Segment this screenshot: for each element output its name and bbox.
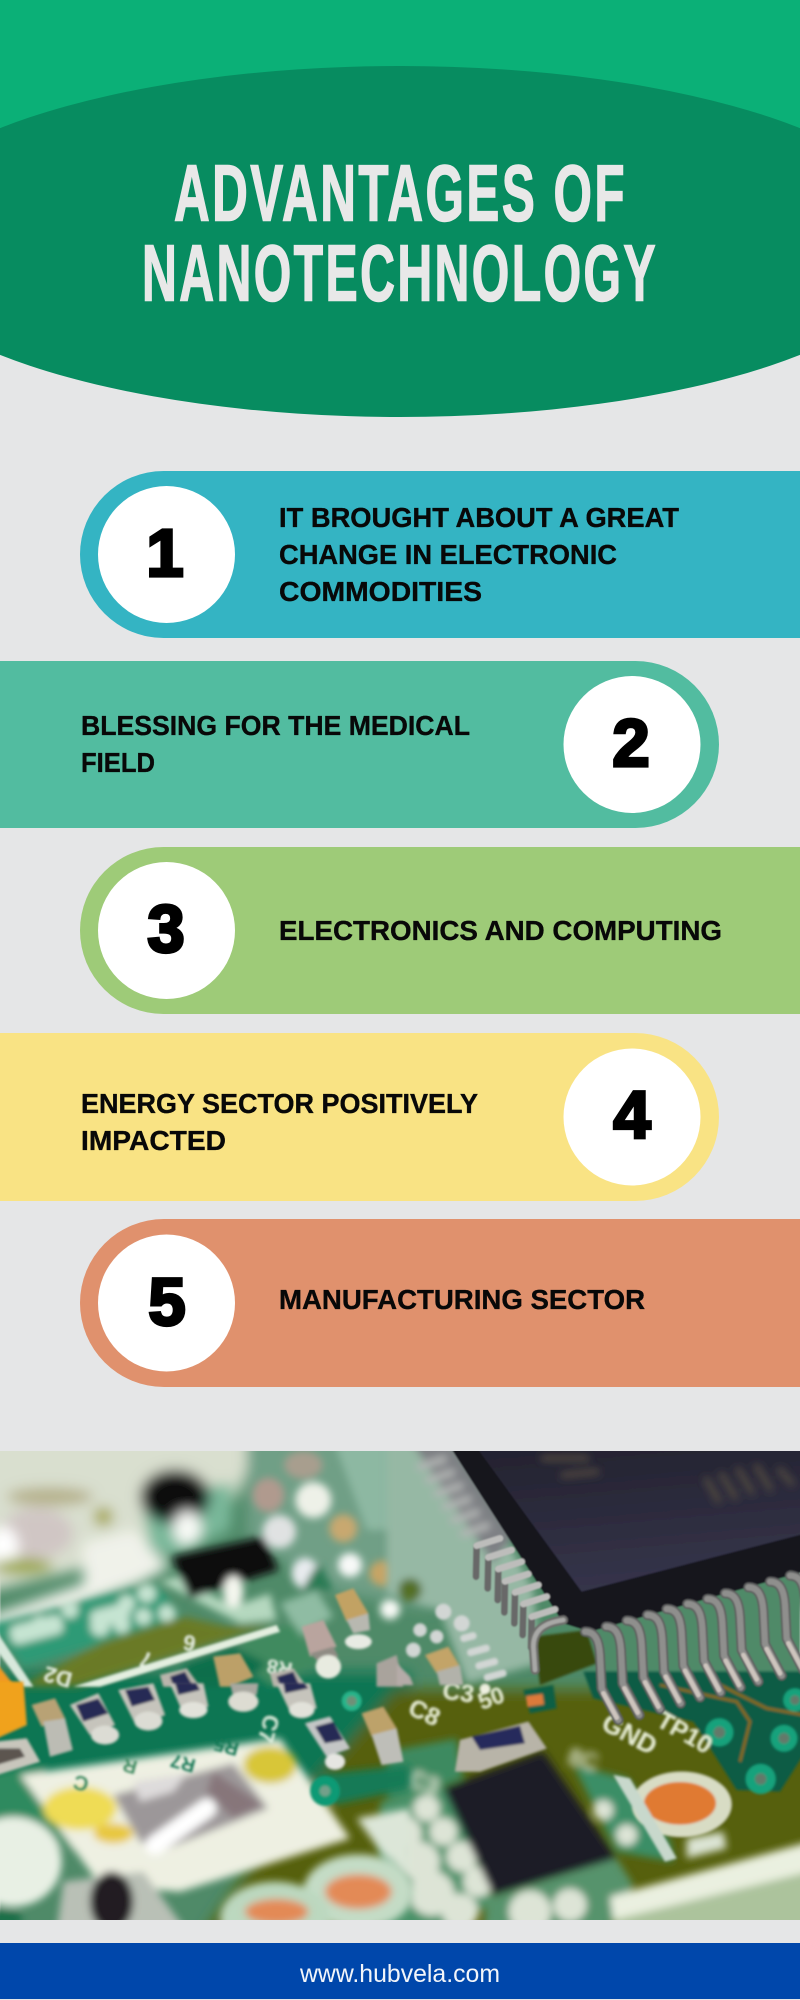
item 5 text: MANUFACTURING SECTOR (279, 1284, 645, 1315)
item 1 number badge (98, 486, 235, 623)
header banner (0, 0, 800, 417)
photo lower right: GND (597, 1707, 662, 1761)
circuit board photo (0, 1451, 800, 1920)
item 2 (0, 661, 719, 828)
item 3 number badge (98, 862, 235, 999)
photo lower left: C7 (253, 1712, 284, 1746)
photo lower right: C8 (404, 1694, 444, 1732)
item 1 (80, 471, 800, 638)
item 4 (0, 1033, 719, 1201)
item 4 text: ENERGY SECTOR POSITIVELY (81, 1088, 478, 1119)
item 3 pill (80, 847, 800, 1014)
item 4 pill (0, 1033, 719, 1201)
website text: www.hubvela.com (299, 1960, 500, 1988)
item 2 number badge (564, 676, 700, 813)
photo lower right: 8C (565, 1743, 602, 1777)
item 1 pill (80, 471, 800, 638)
item 2 text: FIELD (81, 747, 155, 778)
photo upper right with microchip (387, 1440, 800, 1720)
item 2 text (81, 710, 470, 778)
item 4 text (81, 1088, 478, 1156)
photo lower right: TP10 (652, 1707, 717, 1760)
photo lower left: R7 (169, 1749, 198, 1775)
photo lower left: R (121, 1753, 140, 1777)
photo lower right: C3 (405, 1765, 443, 1801)
item 1 text (279, 502, 679, 607)
photo lower left: C (71, 1770, 91, 1796)
item 5 number badge: 5 (148, 1265, 186, 1340)
photo upper left: D2 (41, 1661, 75, 1693)
item 4 number badge: 4 (613, 1078, 651, 1153)
item 1 text: CHANGE IN ELECTRONIC (279, 539, 617, 570)
item 4 text: IMPACTED (81, 1125, 226, 1156)
photo upper left: R8 (265, 1654, 294, 1680)
photo lower right: C3 (441, 1678, 476, 1709)
photo lower left: R5 (212, 1732, 241, 1759)
photo upper left: 7 (138, 1646, 154, 1673)
photo upper left: 6 (181, 1630, 198, 1656)
item 2 text: BLESSING FOR THE MEDICAL (81, 710, 470, 741)
item 3 text: ELECTRONICS AND COMPUTING (279, 915, 722, 946)
item 5 pill (80, 1219, 800, 1387)
item 1 text: COMMODITIES (279, 576, 482, 607)
item 1 number badge: 1 (146, 516, 184, 591)
item 5 number badge (98, 1234, 235, 1372)
photo lower left (0, 1679, 416, 1920)
item 1 text: IT BROUGHT ABOUT A GREAT (279, 502, 679, 533)
main chip body and face (450, 1447, 800, 1632)
item 5 (80, 1219, 800, 1387)
header dark green ellipse (0, 66, 800, 417)
photo base tones (0, 1440, 800, 1940)
header light green band (0, 0, 800, 200)
item 3 (80, 847, 800, 1014)
title (142, 148, 658, 318)
photo upper left (0, 1430, 433, 1693)
footer bar (0, 1943, 800, 1999)
item 2 number badge: 2 (612, 706, 650, 781)
item 3 number badge: 3 (147, 892, 185, 967)
photo lower right: 50 (474, 1681, 508, 1715)
photo lower right (380, 1672, 800, 1933)
item 4 number badge (564, 1048, 700, 1186)
item 2 pill (0, 661, 719, 828)
